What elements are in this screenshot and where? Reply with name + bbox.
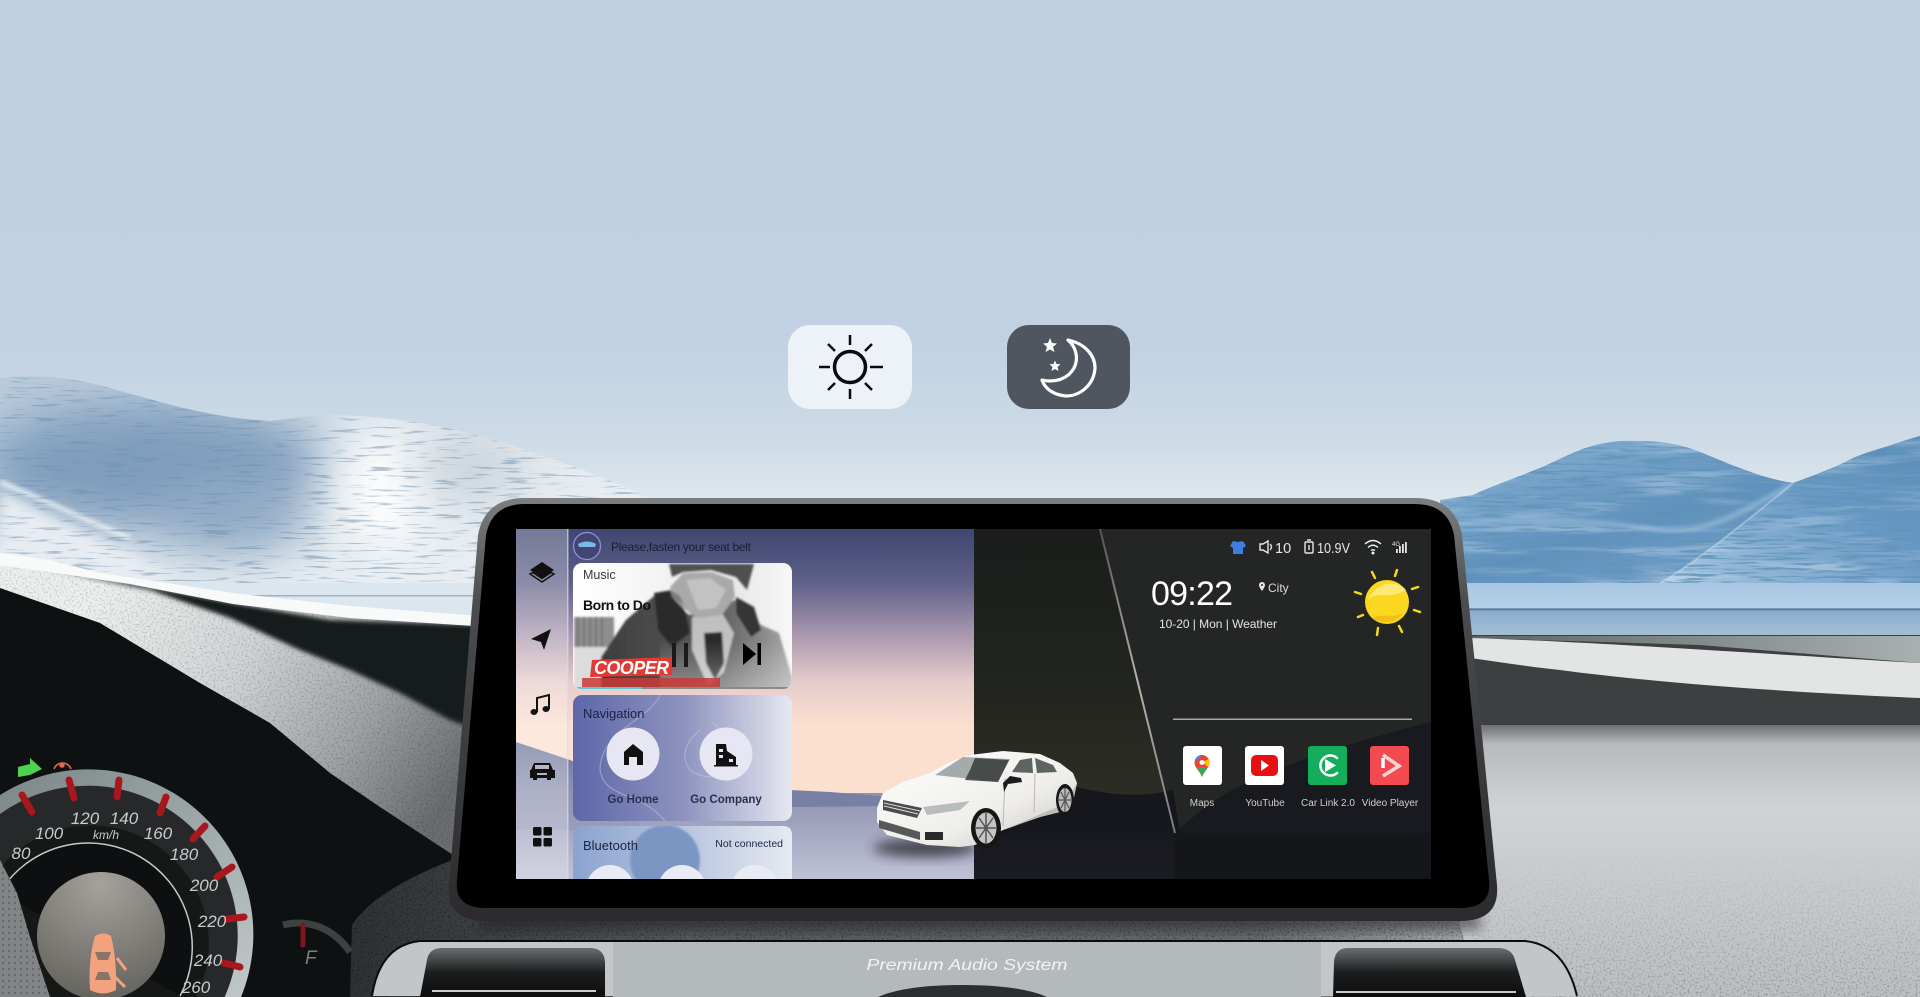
vent panel xyxy=(372,941,1577,997)
icon: battery xyxy=(1305,540,1313,553)
app: video player: Video Player xyxy=(1362,798,1419,809)
icon: location pin xyxy=(1259,582,1265,591)
scenery: snowy mountain left xyxy=(0,370,650,590)
gauge inner arc xyxy=(0,843,192,996)
car body xyxy=(877,751,1077,847)
day mode panel xyxy=(516,529,974,913)
background: sky xyxy=(0,0,1920,600)
album photo xyxy=(574,564,792,689)
dashboard: left cowl xyxy=(0,553,520,997)
divider xyxy=(1173,718,1412,720)
icon: signal bars xyxy=(1392,542,1407,553)
icon: speaker xyxy=(1260,541,1272,553)
dashboard: right leather surface xyxy=(1440,725,1920,997)
icon: navigation arrow xyxy=(531,629,551,650)
app: youtube: YouTube xyxy=(1245,798,1285,809)
icon: signal bars: 4G xyxy=(1392,542,1400,548)
scenery: distant water left xyxy=(0,583,520,628)
seat belt notice: Please,fasten your seat belt xyxy=(611,540,752,554)
display bezel xyxy=(449,498,1497,921)
speed numbers: 80 xyxy=(12,844,31,863)
app: maps: Maps xyxy=(1190,798,1214,809)
headlight xyxy=(923,801,970,815)
icon: door open warning car xyxy=(90,934,126,994)
icon: wifi xyxy=(1365,540,1381,554)
app: maps xyxy=(1183,746,1222,809)
icon: layers xyxy=(530,562,554,582)
lower intake xyxy=(879,820,920,840)
date line: 10-20 | Mon | Weather xyxy=(1159,617,1277,631)
speed numbers: 160 xyxy=(144,824,173,843)
diagonal info panel xyxy=(1100,529,1431,833)
icon: moon and stars xyxy=(1042,338,1095,396)
gauge outer ring xyxy=(0,769,253,997)
speed numbers: 260 xyxy=(181,978,211,997)
speed numbers: 100 xyxy=(35,824,64,843)
speed numbers: km/h xyxy=(93,828,119,842)
scenery: blue mountains right xyxy=(1440,436,1920,584)
icon: pause xyxy=(672,643,688,667)
steering wheel edge xyxy=(0,860,50,997)
bluetooth card xyxy=(573,826,792,879)
center knob xyxy=(878,985,1047,997)
icon: red warning light xyxy=(54,763,71,769)
speed numbers xyxy=(12,809,227,997)
door seam xyxy=(1003,774,1035,826)
music title label: Music xyxy=(583,568,616,582)
app: car link xyxy=(1301,746,1355,809)
speed numbers: 120 xyxy=(71,809,100,828)
toggle: night mode xyxy=(1007,325,1130,409)
windshield xyxy=(935,757,1010,782)
red tick marks xyxy=(22,780,244,967)
bluetooth buttons xyxy=(588,865,776,879)
car shadow xyxy=(873,839,977,857)
navigation card xyxy=(573,695,792,821)
album label: COOPER xyxy=(582,657,720,689)
navigation label: Navigation xyxy=(583,706,644,721)
status bar xyxy=(1230,540,1407,557)
dashboard: lower center leather xyxy=(350,860,1480,997)
white sedan xyxy=(877,751,1077,848)
scenery: water right xyxy=(1440,583,1920,636)
right air vent xyxy=(1333,948,1526,997)
app: car link: Car Link 2.0 xyxy=(1301,798,1355,809)
speed numbers: 240 xyxy=(193,951,223,970)
go home button: Go Home xyxy=(607,794,659,806)
night mode panel xyxy=(974,529,1431,879)
front wheel xyxy=(971,808,1001,848)
voice assistant orb xyxy=(574,532,600,560)
go company button: Go Company xyxy=(690,794,762,806)
icon: green turn arrow xyxy=(18,758,42,777)
music card xyxy=(573,563,792,689)
speedometer gauge xyxy=(0,769,253,997)
icon: music note xyxy=(530,695,550,715)
voltage value: 10.9V xyxy=(1317,541,1350,557)
bluetooth label: Bluetooth xyxy=(583,838,638,853)
lower body shading xyxy=(1003,783,1077,830)
dashboard: right upper bands xyxy=(1440,635,1920,730)
song title: Born to Do xyxy=(583,597,651,613)
display screen xyxy=(516,529,1431,913)
speed numbers: 140 xyxy=(110,809,139,828)
icon: car xyxy=(530,763,555,780)
album label: COOPER: COOPER xyxy=(594,658,669,678)
side windows xyxy=(1012,758,1057,773)
app: video player xyxy=(1362,746,1419,809)
panel center xyxy=(613,942,1321,997)
volume value: 10 xyxy=(1275,541,1291,557)
speed numbers: 180 xyxy=(170,845,199,864)
city label: City xyxy=(1268,581,1289,595)
icon: seat belt shirt xyxy=(1230,541,1246,554)
clock: 09:22 xyxy=(1151,575,1233,613)
rear wheel xyxy=(1056,784,1074,816)
left air vent xyxy=(420,948,605,997)
speed numbers: 200 xyxy=(189,876,219,895)
speed numbers: 220 xyxy=(197,912,227,931)
go home button xyxy=(606,728,660,806)
fuel gauge xyxy=(283,923,350,969)
icon: app grid xyxy=(533,827,552,846)
icon: sun xyxy=(819,335,883,399)
go company button xyxy=(690,728,762,806)
sidebar xyxy=(516,529,568,879)
progress bar xyxy=(577,687,788,689)
fuel label: F xyxy=(305,948,318,969)
icon: weather sun xyxy=(1355,570,1420,635)
fog lamp xyxy=(925,832,943,840)
mirror xyxy=(1003,776,1022,792)
toggle: day mode xyxy=(788,325,912,409)
grille xyxy=(883,800,922,818)
map lines xyxy=(600,695,719,821)
center disc xyxy=(37,872,165,997)
brand text: Premium Audio System xyxy=(866,957,1068,974)
connection status: Not connected xyxy=(715,838,783,850)
app: youtube xyxy=(1245,746,1285,809)
gauge face xyxy=(0,786,238,997)
icon: next track xyxy=(743,643,761,665)
